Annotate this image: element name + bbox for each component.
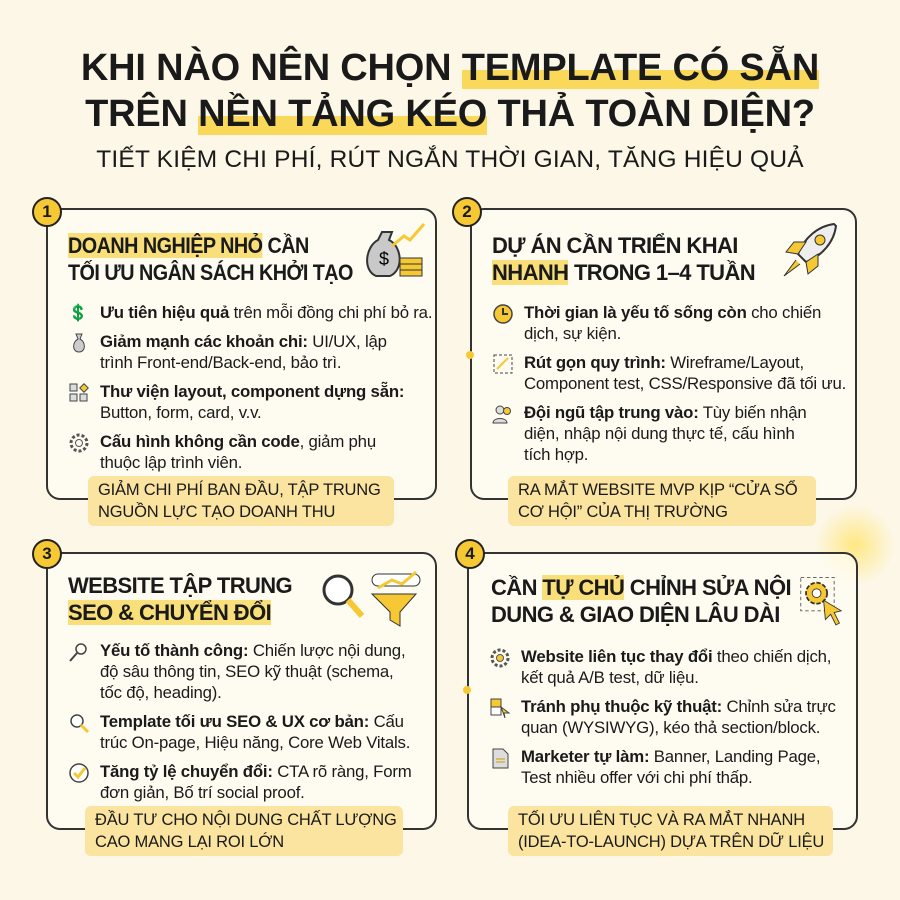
item bbox=[492, 747, 820, 787]
heading 4 bbox=[491, 574, 791, 627]
heading 1: DOANH NGHIỆP NHỎ CẦN bbox=[68, 233, 309, 258]
item: Đội ngũ tập trung vào: Tùy biến nhận bbox=[524, 403, 807, 422]
item: tích hợp. bbox=[524, 445, 588, 464]
callout 4: TỐI ƯU LIÊN TỤC VÀ RA MẮT NHANH bbox=[518, 811, 805, 829]
item bbox=[494, 353, 846, 393]
item bbox=[490, 697, 836, 737]
icon: gear cursor bbox=[800, 577, 842, 626]
item: Giảm mạnh các khoản chi: UI/UX, lập bbox=[100, 332, 387, 351]
item: thuộc lập trình viên. bbox=[100, 453, 242, 472]
item: tốc độ, heading). bbox=[100, 683, 222, 702]
item: Rút gọn quy trình: Wireframe/Layout, bbox=[524, 353, 804, 372]
badge 4: 4 bbox=[465, 544, 475, 563]
item: 💲 bbox=[68, 305, 88, 322]
badge 3: 3 bbox=[42, 544, 52, 563]
connector dot bbox=[463, 686, 471, 694]
icon: money bag bbox=[366, 223, 425, 277]
title bbox=[81, 46, 819, 135]
callout 2 bbox=[508, 476, 816, 526]
heading 1: TỐI ƯU NGÂN SÁCH KHỞI TẠO bbox=[68, 260, 353, 285]
item: Thời gian là yếu tố sống còn cho chiến bbox=[524, 303, 821, 322]
callout 3 bbox=[85, 806, 403, 856]
item: trúc On-page, Hiệu năng, Core Web Vitals. bbox=[100, 733, 410, 752]
title: KHI NÀO NÊN CHỌN TEMPLATE CÓ SẴN bbox=[81, 47, 819, 89]
icon: search funnel bbox=[322, 571, 420, 627]
panel 4 bbox=[467, 552, 858, 830]
list 1 bbox=[68, 303, 432, 472]
callout 1 bbox=[88, 476, 394, 526]
item bbox=[70, 432, 376, 472]
callout 3: CAO MANG LẠI ROI LỚN bbox=[95, 833, 284, 851]
heading 3 bbox=[68, 573, 292, 625]
heading 2: DỰ ÁN CẦN TRIỂN KHAI bbox=[492, 233, 738, 258]
list 4 bbox=[490, 647, 836, 787]
title: TRÊN NỀN TẢNG KÉO THẢ TOÀN DIỆN? bbox=[85, 93, 815, 135]
callout 2: RA MẮT WEBSITE MVP KỊP “CỬA SỔ bbox=[518, 481, 798, 499]
heading 2 bbox=[492, 232, 755, 285]
item: kết quả A/B test, dữ liệu. bbox=[521, 668, 699, 687]
item: quan (WYSIWYG), kéo thả section/block. bbox=[521, 718, 820, 737]
item bbox=[69, 641, 405, 702]
callout 1: NGUỒN LỰC TẠO DOANH THU bbox=[98, 503, 335, 521]
panel 1 bbox=[46, 208, 437, 500]
heading 4: DUNG & GIAO DIỆN LÂU DÀI bbox=[491, 602, 780, 627]
item bbox=[70, 382, 404, 422]
item: đơn giản, Bố trí social proof. bbox=[100, 783, 305, 802]
badge 2: 2 bbox=[462, 202, 472, 221]
connector dot bbox=[466, 351, 474, 359]
badge 4 bbox=[455, 539, 485, 569]
item: Template tối ưu SEO & UX cơ bản: Cấu bbox=[100, 712, 404, 731]
heading 2: NHANH TRONG 1–4 TUẦN bbox=[492, 260, 755, 285]
icon: rocket bbox=[784, 223, 837, 276]
glow sparkle bbox=[815, 505, 895, 585]
item: Test nhiều offer với chi phí thấp. bbox=[521, 768, 753, 787]
heading 1 bbox=[68, 233, 353, 285]
callout 3: ĐẦU TƯ CHO NỘI DUNG CHẤT LƯỢNG bbox=[95, 811, 397, 829]
item: diện, nhập nội dung thực tế, cấu hình bbox=[524, 424, 795, 443]
callout 1: GIẢM CHI PHÍ BAN ĐẦU, TẬP TRUNG bbox=[98, 481, 381, 499]
item: trình Front-end/Back-end, bảo trì. bbox=[100, 353, 341, 372]
item: Tăng tỷ lệ chuyển đổi: CTA rõ ràng, Form bbox=[100, 762, 412, 781]
heading 3: WEBSITE TẬP TRUNG bbox=[68, 573, 292, 598]
item: Cấu hình không cần code, giảm phụ bbox=[100, 432, 376, 451]
callout 4: (IDEA-TO-LAUNCH) DỰA TRÊN DỮ LIỆU bbox=[518, 833, 824, 851]
item: Component test, CSS/Responsive đã tối ưu. bbox=[524, 374, 846, 393]
heading 4: CẦN TỰ CHỦ CHỈNH SỬA NỘI bbox=[491, 575, 791, 600]
item bbox=[492, 403, 807, 464]
item: Button, form, card, v.v. bbox=[100, 403, 262, 422]
heading 3: SEO & CHUYỂN ĐỔI bbox=[68, 600, 271, 625]
callout 2: CƠ HỘI” CỦA THỊ TRƯỜNG bbox=[518, 503, 728, 521]
item: Ưu tiên hiệu quả trên mỗi đồng chi phí bỏ ra. bbox=[100, 303, 432, 322]
badge 3 bbox=[32, 539, 62, 569]
subtitle: TIẾT KIỆM CHI PHÍ, RÚT NGẮN THỜI GIAN, TĂNG HIỆU QUẢ bbox=[96, 146, 804, 173]
badge 1 bbox=[32, 197, 62, 227]
item: Thư viện layout, component dựng sẵn: bbox=[100, 382, 404, 401]
item: Yếu tố thành công: Chiến lược nội dung, bbox=[100, 641, 405, 660]
callout 4 bbox=[508, 806, 833, 856]
badge 2 bbox=[452, 197, 482, 227]
panel 2 bbox=[470, 208, 857, 500]
item: dịch, sự kiện. bbox=[524, 324, 621, 343]
item bbox=[70, 712, 410, 752]
item: độ sâu thông tin, SEO kỹ thuật (schema, bbox=[100, 662, 394, 681]
item: Website liên tục thay đổi theo chiến dịch, bbox=[521, 647, 831, 666]
item bbox=[493, 303, 821, 343]
item bbox=[69, 762, 412, 802]
item: Tránh phụ thuộc kỹ thuật: Chỉnh sửa trực bbox=[521, 697, 836, 716]
list 2 bbox=[492, 303, 846, 464]
panel 3 bbox=[46, 552, 437, 830]
list 3 bbox=[69, 641, 412, 802]
item bbox=[73, 332, 387, 372]
item: Marketer tự làm: Banner, Landing Page, bbox=[521, 747, 820, 766]
badge 1: 1 bbox=[42, 202, 52, 221]
icon: money bag: $ bbox=[379, 249, 389, 269]
item bbox=[490, 647, 831, 687]
